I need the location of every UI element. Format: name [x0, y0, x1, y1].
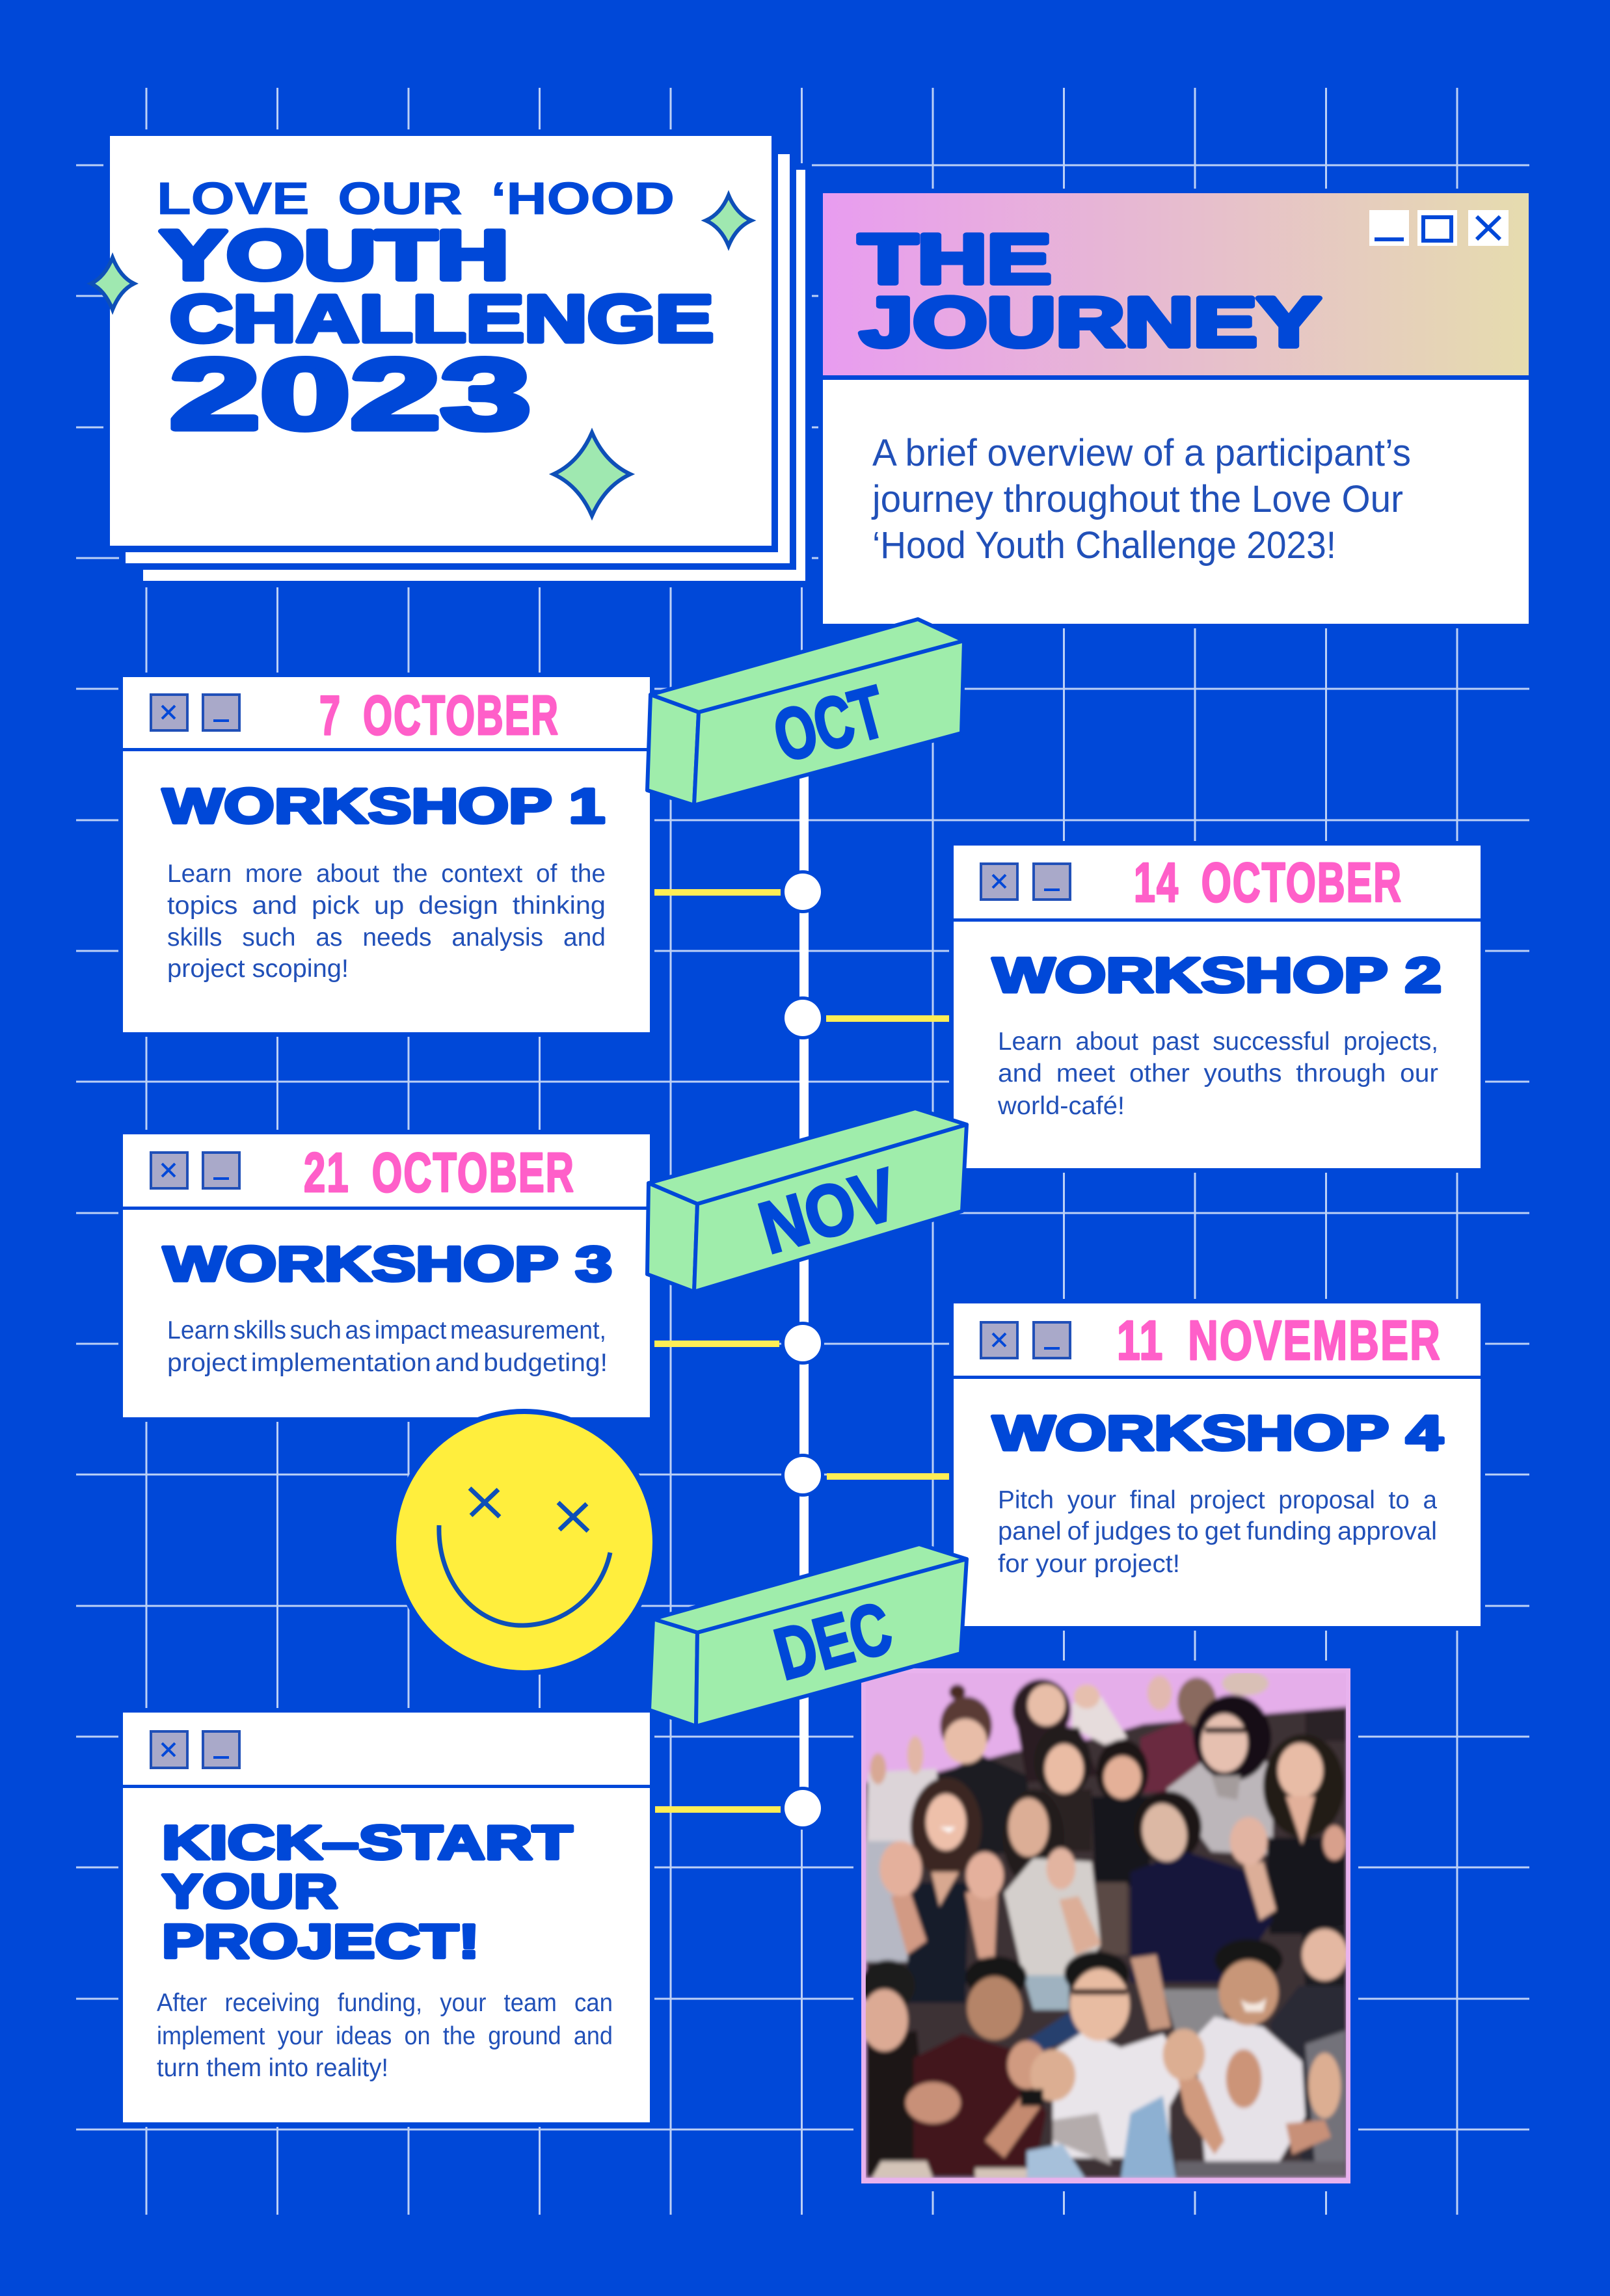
journey description: A brief overview of a participant’s	[872, 432, 1411, 474]
description: turn them into reality!	[157, 2054, 388, 2082]
description: implement your ideas on the ground and	[157, 2022, 613, 2050]
panel: workshop 4	[954, 1303, 1481, 1626]
date: 7 OCTOBER	[319, 685, 559, 747]
description	[157, 1989, 613, 2082]
description	[998, 1486, 1437, 1578]
journey header gradient	[823, 193, 1529, 375]
photo: group of participants	[852, 1659, 1370, 2209]
month block: DEC	[649, 1544, 967, 1726]
heading: PROJECT!	[162, 1916, 479, 1968]
heading: YOUR	[162, 1865, 338, 1918]
window buttons	[151, 1153, 239, 1188]
connector: workshop 2	[785, 1000, 950, 1036]
icon: sparkle left	[91, 258, 134, 310]
connector: workshop 1	[654, 874, 821, 910]
description: world-café!	[997, 1092, 1125, 1120]
title line: Challenge: CHALLENGE	[170, 282, 714, 356]
description	[167, 1316, 608, 1377]
heading: WORKSHOP 4	[993, 1406, 1443, 1460]
connector: kick-start	[655, 1790, 821, 1826]
heading: Journey: JOURNEY	[860, 283, 1321, 361]
description: project implementation and budgeting!	[167, 1349, 608, 1377]
description: panel of judges to get funding approval	[998, 1517, 1437, 1545]
description: Learn about past successful projects,	[998, 1028, 1438, 1056]
month label: DEC	[767, 1586, 900, 1695]
description: After receiving funding, your team can	[157, 1989, 613, 2017]
description: Learn more about the context of the	[167, 860, 606, 888]
title line: 2023: 2023	[170, 338, 531, 450]
journey description: journey throughout the Love Our	[871, 478, 1403, 520]
window buttons	[151, 695, 239, 730]
description: for your project!	[998, 1550, 1180, 1578]
window buttons	[981, 864, 1070, 900]
description: project scoping!	[167, 955, 349, 983]
description	[997, 1028, 1438, 1120]
date: 11 NOVEMBER	[1117, 1310, 1442, 1372]
description	[167, 860, 606, 983]
panel: workshop 3	[123, 1134, 650, 1417]
timeline spine	[799, 768, 809, 1802]
heading: WORKSHOP 3	[163, 1236, 612, 1291]
heading	[162, 1817, 572, 1968]
icon: sparkle top right	[706, 195, 751, 246]
icon: smiley face	[394, 1411, 655, 1673]
window controls	[1369, 210, 1509, 246]
window buttons	[981, 1322, 1070, 1358]
date: 14 OCTOBER	[1134, 852, 1402, 914]
journey description	[871, 432, 1411, 567]
heading: KICK–START	[162, 1817, 572, 1869]
panel: kick-start your project	[123, 1713, 650, 2122]
panel: workshop 1	[123, 677, 650, 1032]
month label: OCT	[766, 670, 893, 777]
month block: NOV	[647, 1108, 967, 1292]
title line: Youth: YOUTH	[160, 216, 509, 294]
month label: NOV	[751, 1153, 906, 1269]
icon: sparkle bottom	[554, 433, 630, 516]
date: 21 OCTOBER	[304, 1142, 575, 1204]
connector: workshop 4	[785, 1457, 950, 1493]
heading: WORKSHOP 1	[163, 779, 605, 833]
panel: the journey	[823, 193, 1529, 624]
description: skills such as needs analysis and	[167, 924, 606, 952]
window buttons	[151, 1731, 239, 1768]
description: Pitch your final project proposal to a	[998, 1486, 1437, 1514]
description: and meet other youths through our	[998, 1060, 1438, 1088]
panel: title card	[91, 136, 805, 581]
panel: workshop 2	[954, 846, 1481, 1168]
heading: The: THE	[859, 220, 1051, 298]
description: topics and pick up design thinking	[167, 892, 606, 920]
description: Learn skills such as impact measurement,	[167, 1316, 606, 1344]
heading: WORKSHOP 2	[993, 948, 1442, 1002]
connector: workshop 3	[654, 1325, 821, 1361]
title line: Love Our 'Hood: LOVE OUR ‘HOOD	[157, 173, 675, 224]
month block: OCT	[647, 619, 964, 805]
journey description: ‘Hood Youth Challenge 2023!	[872, 524, 1336, 567]
